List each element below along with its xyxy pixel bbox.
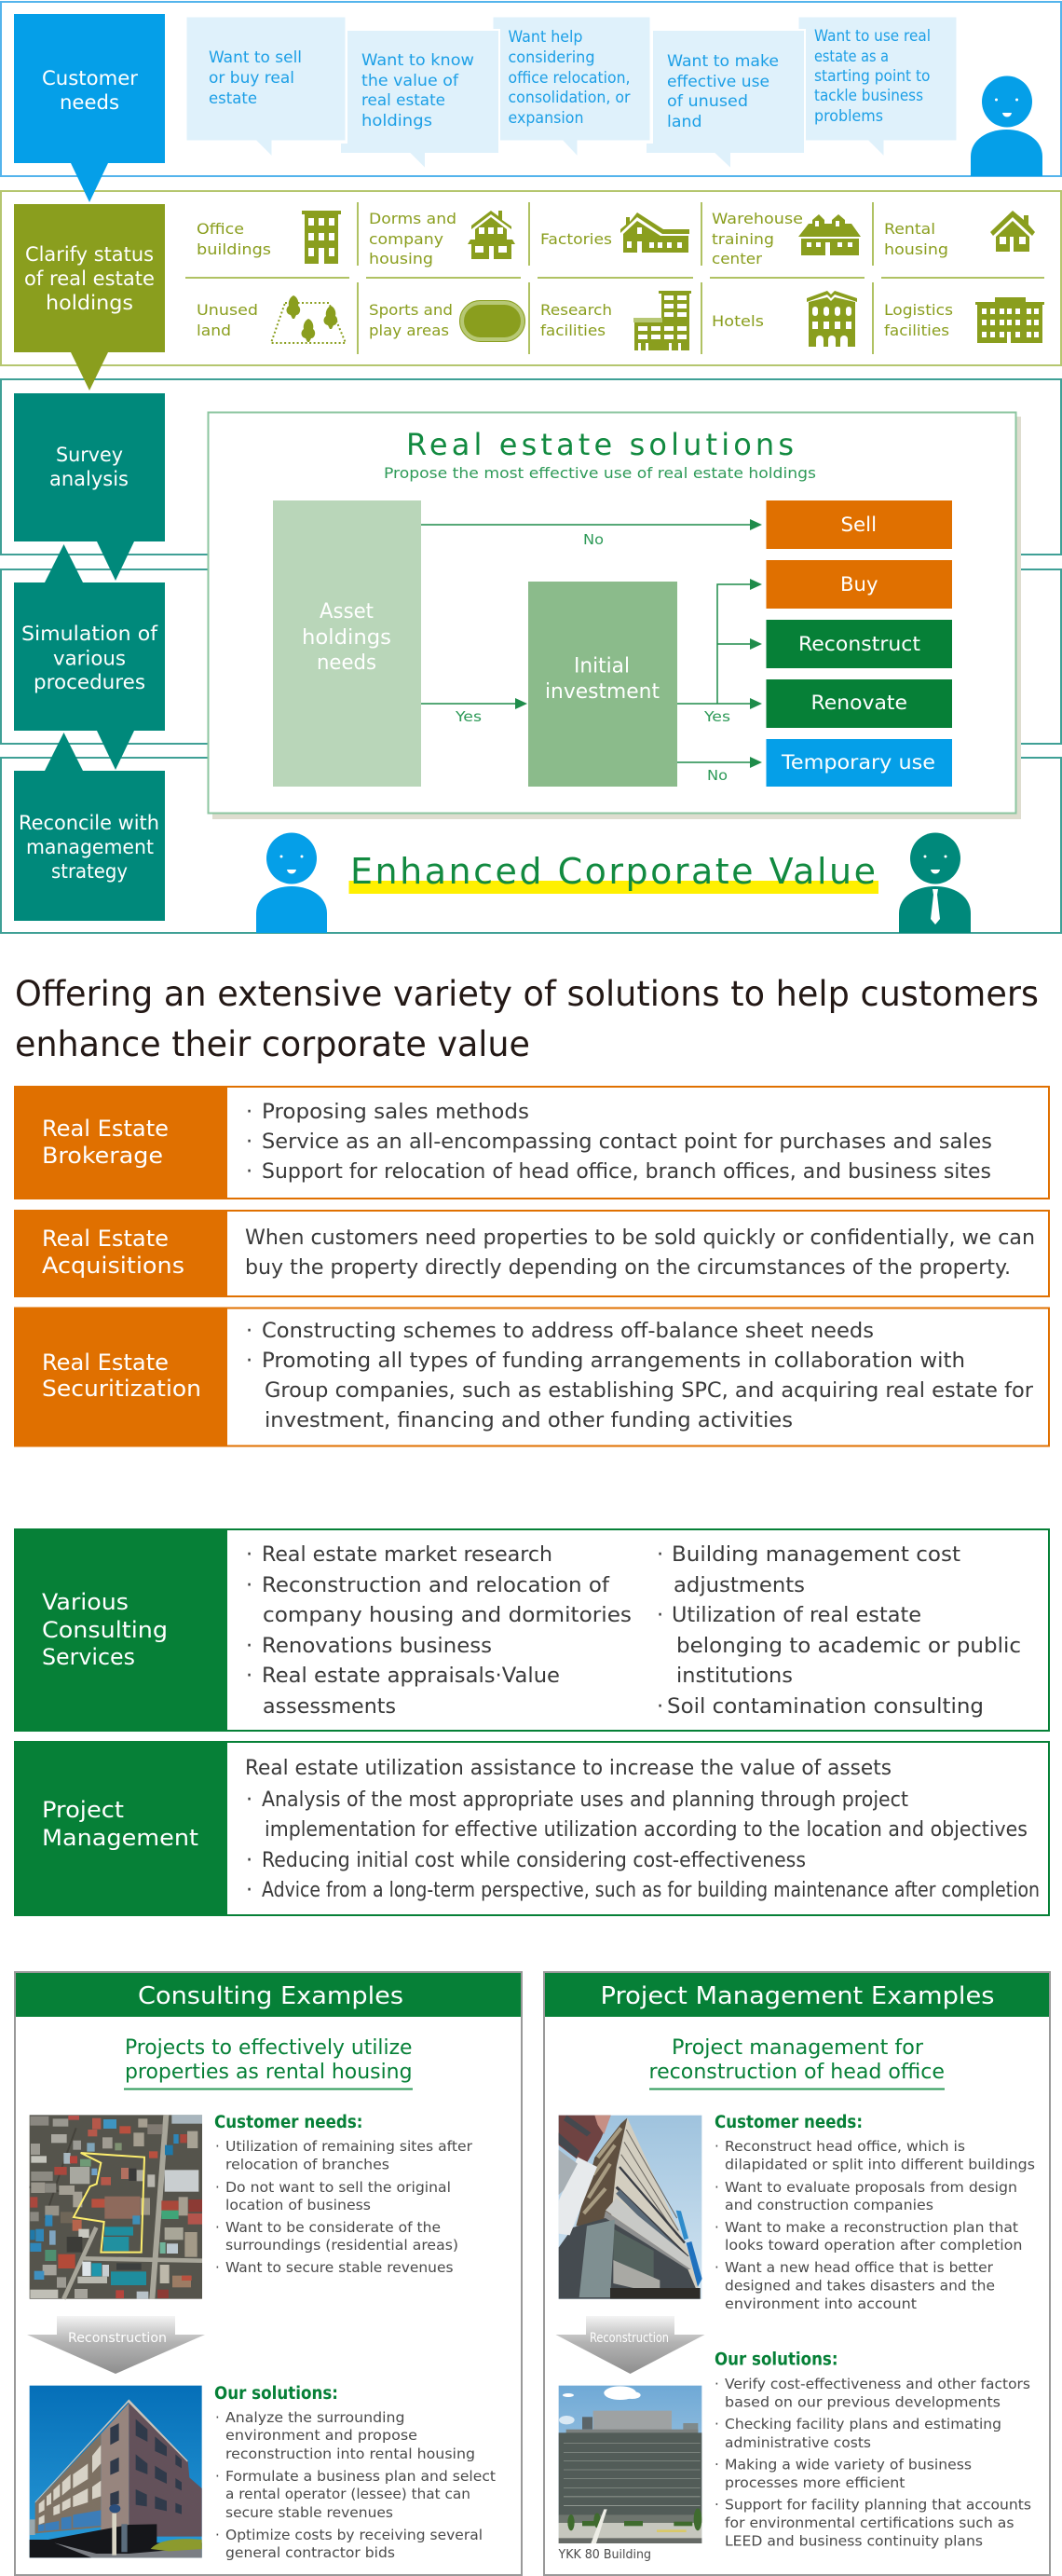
panel: various consulting services: Consulting: [42, 1617, 168, 1643]
our solutions: Making a wide variety of business: [725, 2457, 972, 2473]
our solutions: Our solutions:: [715, 2350, 838, 2369]
customer needs: Want to evaluate proposals from design: [725, 2179, 1017, 2196]
case title: Projects to effectively utilize: [125, 2036, 412, 2060]
ground: [559, 2514, 701, 2523]
customer needs: Utilization of remaining sites after: [225, 2138, 473, 2155]
our solutions: general contractor bids: [225, 2544, 395, 2561]
customer needs: Customer needs:: [715, 2113, 863, 2132]
box: asset holdings needs: Asset: [320, 599, 374, 623]
icon: training center: [798, 214, 861, 255]
outcome: sell: Sell: [840, 514, 877, 537]
our solutions: ·: [215, 2468, 220, 2485]
list column 1: ·: [246, 1573, 252, 1597]
bubble: want to make effective use: land: [667, 113, 702, 131]
list column 2: Soil contamination consulting: [667, 1694, 984, 1719]
item: warehouse training center: center: [712, 250, 762, 267]
panel: various consulting services: [14, 1528, 1049, 1732]
step: survey analysis: analysis: [49, 468, 129, 491]
balconies: [39, 2445, 101, 2525]
list column 2: [657, 1542, 1021, 1719]
our solutions: ·: [215, 2409, 220, 2426]
item: dorms and company housing: housing: [369, 250, 433, 267]
item: dorms and company housing: [369, 210, 515, 267]
our solutions: processes more efficient: [725, 2474, 905, 2491]
box: initial investment: investment: [545, 679, 660, 704]
arrow: reconstruction: [27, 2316, 205, 2374]
box: asset holdings needs: holdings: [302, 625, 391, 650]
step: survey analysis: [14, 393, 165, 581]
our solutions: ·: [715, 2457, 719, 2473]
icon: stadium track: [460, 300, 525, 341]
icon: office building: [302, 211, 341, 264]
lower glazing: [559, 2218, 701, 2299]
customer needs: ·: [715, 2219, 719, 2236]
customer needs: Want to be considerate of the: [225, 2219, 441, 2236]
facade bands: [564, 2443, 701, 2506]
customer needs: environment into account: [725, 2295, 917, 2312]
list: ·: [246, 1848, 252, 1872]
our solutions: ·: [715, 2416, 719, 2432]
icon: unused land with trees: [271, 295, 346, 343]
step: clarify status: Clarify status: [25, 243, 154, 267]
list: Promoting all types of funding arrangements in collaboration with: [262, 1349, 965, 1373]
step: reconcile with management strategy: management: [26, 836, 154, 859]
arrowheads: [515, 519, 762, 768]
photo: YKK 80 Building: [559, 2386, 701, 2543]
icon: business person with tie: [899, 833, 971, 933]
panel header: Consulting Examples: [138, 1982, 403, 2010]
description: [245, 1226, 1035, 1280]
item: research facilities: [540, 291, 691, 350]
case title: [648, 2036, 945, 2090]
heading: offering an extensive variety of solutions: [15, 974, 1039, 1064]
list: Service as an all-encompassing contact point for purchases and sales: [262, 1130, 992, 1154]
panel: real estate brokerage: Brokerage: [42, 1143, 163, 1169]
panel: real estate acquisitions: Acquisitions: [42, 1253, 184, 1279]
heading: offering an extensive variety of solutions: enhance their corporate value: [15, 1024, 530, 1064]
bubble: want help considering office relocation: expansion: [509, 109, 583, 128]
outcome: buy: [766, 560, 952, 609]
blue sign: [676, 2211, 688, 2240]
list column 2: belonging to academic or public: [676, 1634, 1021, 1658]
icon: dormitory: [468, 211, 515, 259]
our solutions: based on our previous developments: [725, 2393, 1001, 2410]
outcome: renovate: [766, 679, 952, 728]
heading: offering an extensive variety of solutions: Offering an extensive variety of solutions to help customers: [15, 974, 1039, 1014]
bubble: want to make effective use: Want to make: [667, 52, 779, 71]
customer needs: looks toward operation after completion: [725, 2237, 1023, 2254]
icon: hotel: [807, 291, 857, 347]
list column 1: assessments: [263, 1694, 396, 1719]
panel: customer needs row: [1, 2, 1061, 176]
photo caption: YKK 80 Building: [558, 2548, 651, 2562]
photo: rental housing building: [30, 2386, 202, 2557]
panel: various consulting services: Various: [42, 1589, 129, 1615]
panel header: [16, 1973, 521, 2017]
list: ·: [246, 1319, 252, 1343]
flow labels: [455, 531, 730, 784]
customer needs: Do not want to sell the original: [225, 2179, 451, 2196]
our solutions: [715, 2350, 1031, 2550]
outcome: temporary use: [766, 739, 952, 787]
bubble: want to sell or buy: [186, 17, 346, 157]
list: [246, 1100, 992, 1184]
bubble: want to use real estate as a starting point: problems: [814, 107, 883, 126]
our solutions: [214, 2384, 496, 2561]
our solutions: ·: [715, 2376, 719, 2392]
bubble: want help considering office relocation: considering: [509, 48, 594, 67]
list column 2: adjustments: [674, 1573, 805, 1597]
list: ·: [246, 1878, 252, 1902]
arrow: reconstruction: [555, 2316, 704, 2374]
customer needs: ·: [715, 2179, 719, 2196]
customer needs: and construction companies: [725, 2197, 933, 2213]
brick neighbour: [559, 2116, 611, 2165]
customer needs: relocation of branches: [225, 2157, 389, 2173]
flow labels: Yes: [703, 708, 730, 725]
item: factories: Factories: [540, 230, 612, 248]
item: unused land: [197, 295, 346, 343]
our solutions: for environmental certifications such as: [725, 2514, 1014, 2531]
site boundary: [74, 2153, 144, 2253]
customer needs: ·: [215, 2179, 220, 2196]
icon: customer person bottom: [256, 833, 327, 933]
item: research facilities: Research: [540, 301, 612, 319]
customer needs: location of business: [225, 2197, 371, 2213]
customer needs: Want to secure stable revenues: [225, 2259, 454, 2276]
panel header: [545, 1973, 1049, 2017]
list column 1: ·: [246, 1634, 252, 1658]
our solutions: Verify cost-effectiveness and other factors: [725, 2376, 1030, 2392]
customer needs: Customer needs:: [214, 2113, 363, 2132]
list: ·: [246, 1130, 252, 1154]
customer needs: [715, 2113, 1035, 2312]
card title: Real estate solutions: [406, 427, 794, 462]
outcome: renovate: Renovate: [810, 692, 907, 715]
panel outlines: survey, simulation, reconcile rows: [1, 379, 1061, 933]
step: customer needs: [14, 14, 165, 202]
customer needs: ·: [715, 2138, 719, 2155]
bubble: want to sell or buy: estate: [209, 89, 257, 108]
panel: real estate securitization: Real Estate: [42, 1350, 169, 1376]
list column 1: [246, 1542, 632, 1719]
list column 1: ·: [246, 1664, 252, 1688]
bubble: want to know the value: holdings: [361, 112, 432, 130]
customer needs: Want a new head office that is better: [725, 2259, 994, 2276]
list column 2: institutions: [676, 1664, 793, 1688]
list column 2: ·: [657, 1694, 663, 1719]
description: buy the property directly depending on the circumstances of the property.: [245, 1255, 1011, 1280]
item: hotels: [712, 291, 857, 347]
item: warehouse training center: [712, 210, 861, 267]
item: unused land: Unused: [197, 301, 258, 319]
outcome: temporary use: Temporary use: [781, 751, 935, 774]
our solutions: Support for facility planning that accounts: [725, 2496, 1031, 2513]
outcome: buy: Buy: [840, 573, 878, 596]
item: office buildings: [197, 211, 341, 264]
item: hotels: Hotels: [712, 312, 764, 330]
customer needs: ·: [215, 2259, 220, 2276]
step: reconcile with management strategy: [14, 733, 165, 921]
bubble: want to know the value: Want to know: [361, 51, 474, 70]
customer needs: ·: [215, 2138, 220, 2155]
panel: real estate brokerage: [14, 1086, 1049, 1199]
panel: consulting examples: [15, 1972, 522, 2575]
item: rental housing: [884, 211, 1035, 258]
panel: real estate acquisitions: Real Estate: [42, 1226, 169, 1252]
customer needs: [214, 2113, 473, 2276]
list: Reducing initial cost while considering cost-effectiveness: [262, 1848, 806, 1872]
description: When customers need properties to be sold quickly or confidentially, we can: [245, 1226, 1035, 1250]
list column 1: Renovations business: [262, 1634, 492, 1658]
concrete band: [606, 2198, 692, 2269]
list column 2: ·: [657, 1603, 663, 1627]
list: investment, financing and other funding activities: [265, 1408, 793, 1432]
item: logistics facilities: [884, 297, 1044, 343]
list column 2: Building management cost: [672, 1542, 960, 1567]
panel: real estate securitization: Securitization: [42, 1376, 201, 1402]
list: ·: [246, 1100, 252, 1124]
item: sports and play areas: Sports and: [369, 301, 453, 319]
bubble: want to know the value: [340, 30, 499, 170]
step: reconcile with management strategy: Reconcile with: [19, 812, 159, 835]
bubble: want to make effective use: [646, 30, 805, 170]
list: Group companies, such as establishing SPC, and acquiring real estate for: [265, 1378, 1034, 1403]
item: rental housing: housing: [884, 240, 948, 258]
photo: aerial view of site: [30, 2115, 202, 2299]
item: logistics facilities: Logistics: [884, 301, 953, 319]
box: asset holdings needs: needs: [317, 651, 376, 675]
step: customer needs: Customer: [42, 67, 138, 90]
panel: real estate solutions flow card: [209, 412, 1021, 819]
list: Constructing schemes to address off-balance sheet needs: [262, 1319, 874, 1343]
item: sports and play areas: play areas: [369, 322, 449, 339]
list: [245, 1756, 1040, 1902]
bubble: want to use real estate as a starting point: tackle business: [814, 87, 923, 105]
arrow: reconstruction: Reconstruction: [68, 2331, 167, 2346]
bubble: want to know the value: the value of: [361, 72, 459, 90]
list: Real estate utilization assistance to increase the value of assets: [245, 1756, 892, 1780]
roads: [30, 2115, 202, 2299]
item: unused land: land: [197, 322, 231, 339]
step: simulation of various procedures: various: [53, 647, 126, 671]
bubble: want help considering office relocation: Want help: [509, 28, 583, 47]
item: factories: [540, 212, 689, 253]
panel: real estate brokerage: Real Estate: [42, 1116, 169, 1142]
flow labels: Yes: [455, 708, 482, 725]
flow labels: No: [583, 531, 604, 548]
outcome: reconstruct: Reconstruct: [798, 633, 920, 656]
item: office buildings: Office: [197, 220, 244, 238]
our solutions: reconstruction into rental housing: [225, 2446, 475, 2462]
customer needs: designed and takes disasters and the: [725, 2278, 995, 2295]
our solutions: LEED and business continuity plans: [725, 2533, 983, 2550]
outcome: sell: [766, 500, 952, 549]
panel: project management examples: [544, 1972, 1050, 2575]
bubble: want to make effective use: effective use: [667, 73, 769, 91]
item: research facilities: facilities: [540, 322, 606, 339]
step: reconcile with management strategy: strategy: [51, 860, 128, 884]
panel: real estate acquisitions: [14, 1210, 1049, 1297]
case title: [124, 2036, 413, 2090]
our solutions: secure stable revenues: [225, 2504, 393, 2521]
step: clarify status: of real estate: [24, 267, 155, 291]
windows: [110, 2419, 182, 2514]
box: asset holdings needs: [273, 500, 421, 787]
panel: project management: Project: [42, 1797, 124, 1823]
ground floor and road: [30, 2524, 202, 2557]
our solutions: Analyze the surrounding: [225, 2409, 404, 2426]
list column 1: Reconstruction and relocation of: [262, 1573, 610, 1597]
case title: reconstruction of head office: [648, 2061, 945, 2084]
list: Analysis of the most appropriate uses and planning through project: [262, 1788, 908, 1812]
list column 2: ·: [657, 1542, 663, 1567]
icon: customer person: [971, 76, 1042, 176]
our solutions: a rental operator (lessee) that can: [225, 2486, 470, 2502]
bubble: want to sell or buy: or buy real: [209, 69, 294, 88]
panel header: Project Management Examples: [600, 1982, 995, 2010]
item: office buildings: buildings: [197, 240, 271, 258]
bubble: want to use real estate as a starting point: Want to use real: [814, 27, 931, 46]
item: sports and play areas: [369, 300, 525, 341]
customer needs: ·: [215, 2219, 220, 2236]
list: [246, 1319, 1034, 1432]
panel: real estate holdings row: [1, 191, 1061, 365]
our solutions: ·: [715, 2496, 719, 2513]
balcony blue panels: [38, 2510, 101, 2531]
bubble: want to use real estate as a starting point: [798, 17, 957, 157]
bubble: want help considering office relocation: office relocation,: [509, 69, 630, 88]
bubble: want to know the value: real estate: [361, 91, 445, 110]
icon: factory: [620, 212, 689, 253]
step: simulation of various procedures: [14, 544, 165, 770]
our solutions: ·: [215, 2527, 220, 2543]
left brown face: [576, 2117, 627, 2226]
item: logistics facilities: facilities: [884, 322, 949, 339]
our solutions: Checking facility plans and estimating: [725, 2416, 1001, 2432]
step: simulation of various procedures: procedures: [34, 671, 145, 694]
list column 1: Real estate market research: [262, 1542, 552, 1567]
row dividers: [185, 202, 1044, 354]
customer needs: ·: [715, 2259, 719, 2276]
rooftops: [30, 2115, 202, 2299]
our solutions: Our solutions:: [214, 2384, 338, 2404]
our solutions: Formulate a business plan and select: [225, 2468, 496, 2485]
item: dorms and company housing: company: [369, 230, 443, 248]
arrow: reconstruction: Reconstruction: [590, 2331, 669, 2346]
tower stripes: [617, 2130, 688, 2260]
bubble: want to use real estate as a starting point: estate as a: [814, 48, 889, 66]
step: clarify status: [14, 204, 165, 391]
panel: project management: Management: [42, 1825, 198, 1851]
outcome: reconstruct: [766, 620, 952, 668]
icon: research building: [633, 291, 691, 350]
bubble: want to sell or buy: Want to sell: [209, 48, 302, 67]
flow arrows: [421, 525, 751, 762]
our solutions: Optimize costs by receiving several: [225, 2527, 483, 2543]
box: initial investment: Initial: [574, 654, 630, 678]
list column 2: Utilization of real estate: [672, 1603, 921, 1627]
panel: real estate securitization: [14, 1307, 1049, 1446]
item: warehouse training center: training: [712, 230, 774, 248]
clouds: [559, 2386, 641, 2424]
list: ·: [246, 1349, 252, 1373]
highlighted text: enhanced corporate value: Enhanced Corporate Value: [350, 851, 876, 892]
tower facade: [607, 2117, 701, 2297]
case title: Project management for: [672, 2036, 924, 2060]
white panel: [559, 2157, 597, 2235]
list column 1: company housing and dormitories: [263, 1603, 632, 1627]
bubble: want to use real estate as a starting point: starting point to: [814, 67, 930, 86]
icon: rental house: [990, 211, 1035, 252]
item: dorms and company housing: Dorms and: [369, 210, 456, 227]
customer needs: Reconstruct head office, which is: [725, 2138, 965, 2155]
bubble: want to make effective use: of unused: [667, 92, 748, 111]
our solutions: administrative costs: [725, 2434, 871, 2451]
icon: logistics building: [975, 297, 1044, 343]
list: Support for relocation of head office, branch offices, and business sites: [262, 1159, 991, 1184]
step: simulation of various procedures: Simulation of: [21, 623, 157, 646]
box: initial investment: [528, 582, 677, 787]
item: warehouse training center: Warehouse: [712, 210, 803, 227]
list: ·: [246, 1159, 252, 1184]
step: customer needs: needs: [60, 91, 119, 115]
step: survey analysis: Survey: [56, 444, 123, 467]
trees: [567, 2508, 701, 2530]
photo: old head office: [559, 2116, 702, 2299]
step: clarify status: holdings: [46, 292, 133, 315]
our solutions: environment and propose: [225, 2427, 417, 2444]
list column 1: ·: [246, 1542, 252, 1567]
case title: properties as rental housing: [125, 2061, 412, 2084]
customer needs: Want to make a reconstruction plan that: [725, 2219, 1018, 2236]
card subtitle: Propose the most effective use of real estate holdings: [384, 464, 816, 482]
list column 1: Real estate appraisals·Value: [262, 1664, 560, 1688]
bubble: want help considering office relocation: [493, 17, 650, 157]
panel: project management: [14, 1741, 1049, 1916]
list: Proposing sales methods: [262, 1100, 529, 1124]
customer needs: surroundings (residential areas): [225, 2237, 458, 2254]
flow labels: No: [707, 767, 728, 784]
list: ·: [246, 1788, 252, 1812]
item: rental housing: Rental: [884, 220, 935, 238]
bubble: want help considering office relocation: consolidation, or: [509, 89, 631, 107]
customer needs: dilapidated or split into different buildings: [725, 2157, 1035, 2173]
panel: various consulting services: Services: [42, 1644, 135, 1670]
